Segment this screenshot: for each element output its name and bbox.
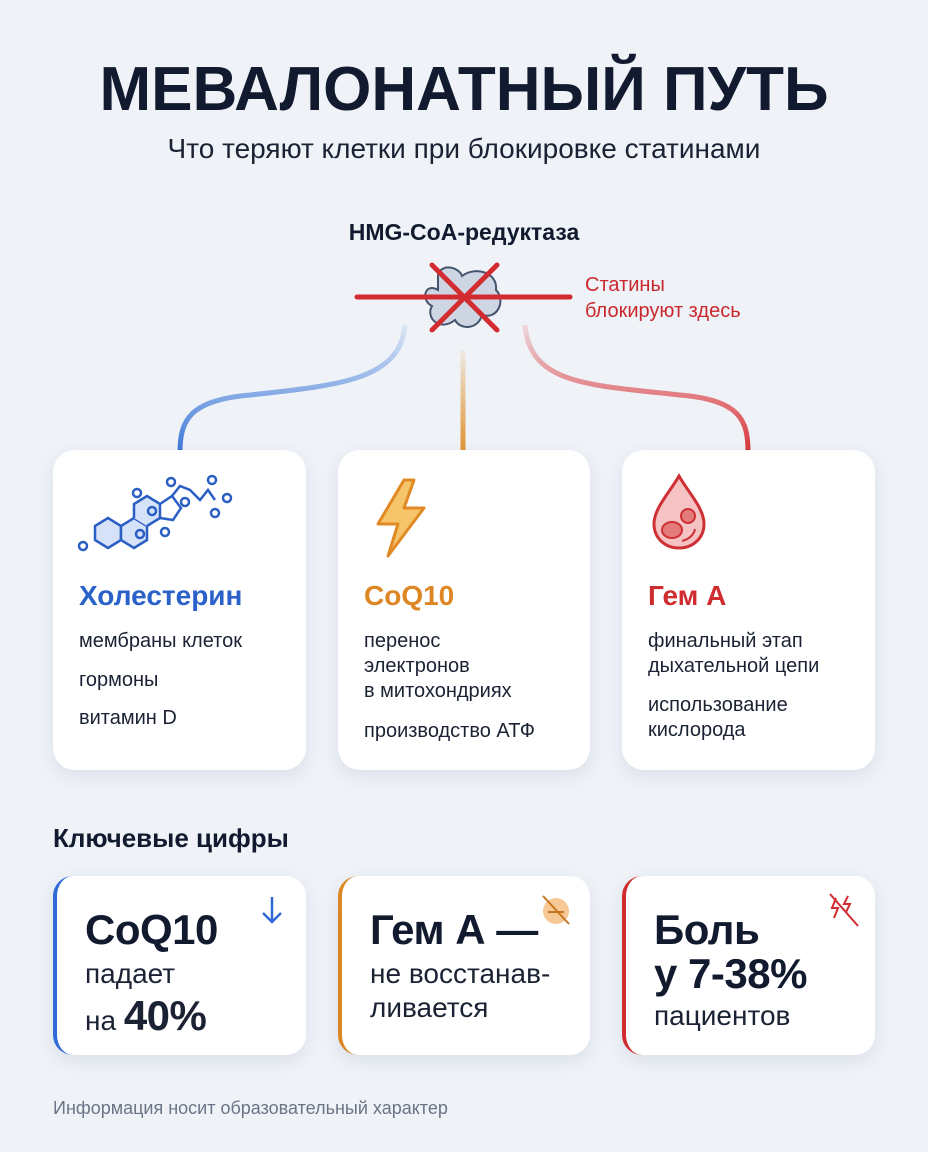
callout: statins block here: блокируют здесь [585,300,741,322]
callout: statins block here: Статины [585,274,665,296]
icon: crossed pain [829,893,859,927]
key card: heme A: Гем А — [370,906,538,953]
pathway diagram [178,262,750,450]
key card: pain [622,876,875,1055]
key card: pain: у 7-38% [654,950,807,997]
key card: CoQ10 [53,876,306,1055]
panel: heme A [622,450,875,770]
enzyme label: HMG-CoA-редуктаза [349,219,579,245]
subtitle: Что теряют клетки при блокировке статинами [168,133,760,164]
panel: heme A: дыхательной цепи [648,655,819,677]
icon: blood drop [652,473,706,550]
icon: enzyme blocked [357,265,570,330]
key card: heme A: ливается [370,992,488,1023]
panel: CoQ10 [338,450,590,770]
key card: pain: пациентов [654,1000,790,1031]
arrow: to cholesterol [180,325,405,452]
panel: CoQ10: CoQ10 [364,580,454,611]
icon: steroid molecule [78,474,232,552]
panel: heme A: кислорода [648,719,746,741]
heading: key figures: Ключевые цифры [53,823,289,853]
icon: lightning [376,478,426,558]
key card: pain: Боль [654,906,759,953]
key card: CoQ10: на 40% [85,992,206,1039]
callout: statins block here [585,274,741,322]
panel: CoQ10: электронов [364,655,470,677]
key card: heme A: не восстанав- [370,958,550,989]
arrow: to heme A [525,325,748,452]
arrow: to CoQ10 [460,350,466,452]
panel: cholesterol: гормоны [79,669,158,691]
title: МЕВАЛОНАТНЫЙ ПУТЬ [99,55,829,124]
panel: cholesterol: Холестерин [79,580,242,611]
footer note: Информация носит образовательный характер [53,1098,448,1118]
icon: crossed minus [542,895,570,925]
panel: heme A: использование [648,694,788,716]
key card: heme A [338,876,590,1055]
key card: CoQ10: падает [85,958,175,989]
key card: CoQ10: CoQ10 [85,906,218,953]
panel: CoQ10: перенос [364,630,440,652]
panel: cholesterol: мембраны клеток [79,630,242,652]
icon: down arrow [262,897,282,924]
panel: cholesterol [53,450,306,770]
panel: cholesterol: витамин D [79,707,177,729]
panel: heme A: Гем А [648,580,726,611]
panel: CoQ10: производство АТФ [364,720,535,742]
panel: CoQ10: в митохондриях [364,680,512,702]
panel: heme A: финальный этап [648,630,803,652]
